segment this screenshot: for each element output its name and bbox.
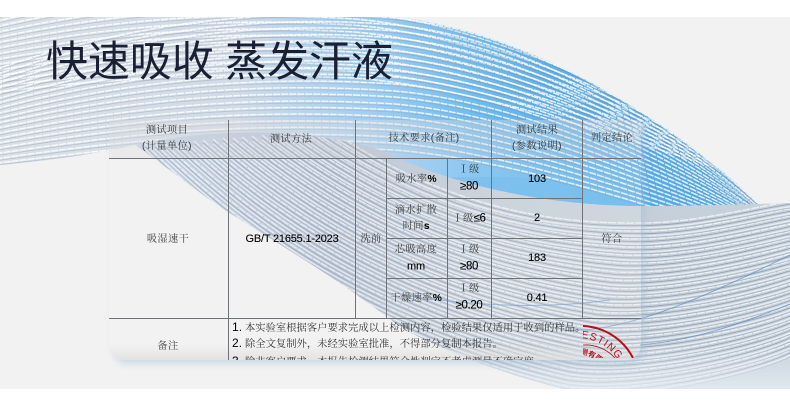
remarks line 1: 1. 本实验室根据客户要求完成以上检测内容，检验结果仅适用于收到的样品。 xyxy=(232,320,585,334)
column header: test results: 测试结果 xyxy=(516,125,558,136)
test standard: GB/T 21655.1-2023 xyxy=(245,233,339,245)
grade: wicking height: ≥80 xyxy=(460,260,478,272)
column header: test item xyxy=(142,124,192,152)
row: wicking height xyxy=(395,244,437,272)
column header: test results: (参数说明) xyxy=(512,141,562,152)
row: drip diffusion time: 时间s xyxy=(403,221,429,232)
condition: before washing: 洗前 xyxy=(360,234,382,245)
row: water absorption: 吸水率% xyxy=(396,174,436,185)
grade: wicking height xyxy=(458,244,480,272)
column header: test item: 测试项目 xyxy=(146,125,188,136)
column header: technical requirements: 技术要求(备注) xyxy=(388,133,460,144)
row label: moisture wicking: 吸湿速干 xyxy=(147,234,189,245)
value: drying rate: 0.41 xyxy=(527,292,547,304)
title: 快速吸收 蒸发汗液 xyxy=(46,38,393,85)
value: water absorption: 103 xyxy=(528,173,546,185)
row: wicking height: 芯吸高度 xyxy=(395,244,437,256)
row label: remarks: 备注 xyxy=(157,341,179,352)
panel: test results table xyxy=(109,120,641,360)
grade: drying rate: Ⅰ级 xyxy=(458,284,480,294)
grade: drying rate: ≥0.20 xyxy=(456,300,482,312)
grade: drying rate xyxy=(456,282,482,312)
column header: conclusion: 判定结论 xyxy=(591,133,633,144)
grade: drip diffusion time: Ⅰ级≤6 xyxy=(452,212,486,224)
row: wicking height: mm xyxy=(407,260,425,272)
column header: test results xyxy=(512,124,562,152)
grade: wicking height: Ⅰ级 xyxy=(458,244,480,256)
remarks line 2: 2. 除全文复制外，未经实验室批准，不得部分复制本报告。 xyxy=(232,336,503,350)
grade: water absorption xyxy=(458,164,480,192)
value: drip diffusion time: 2 xyxy=(534,212,540,224)
value: wicking height: 183 xyxy=(528,252,546,264)
column header: test item: (计量单位) xyxy=(142,141,192,152)
row: drip diffusion time: 滴水扩散 xyxy=(395,205,437,216)
grade: water absorption: Ⅰ级 xyxy=(458,164,480,176)
row: drying rate: 干燥速率% xyxy=(390,293,442,304)
conclusion: pass: 符合 xyxy=(601,234,623,245)
grade: water absorption: ≥80 xyxy=(460,180,478,192)
row: drip diffusion time xyxy=(395,204,437,232)
column header: test method: 测试方法 xyxy=(270,134,312,145)
